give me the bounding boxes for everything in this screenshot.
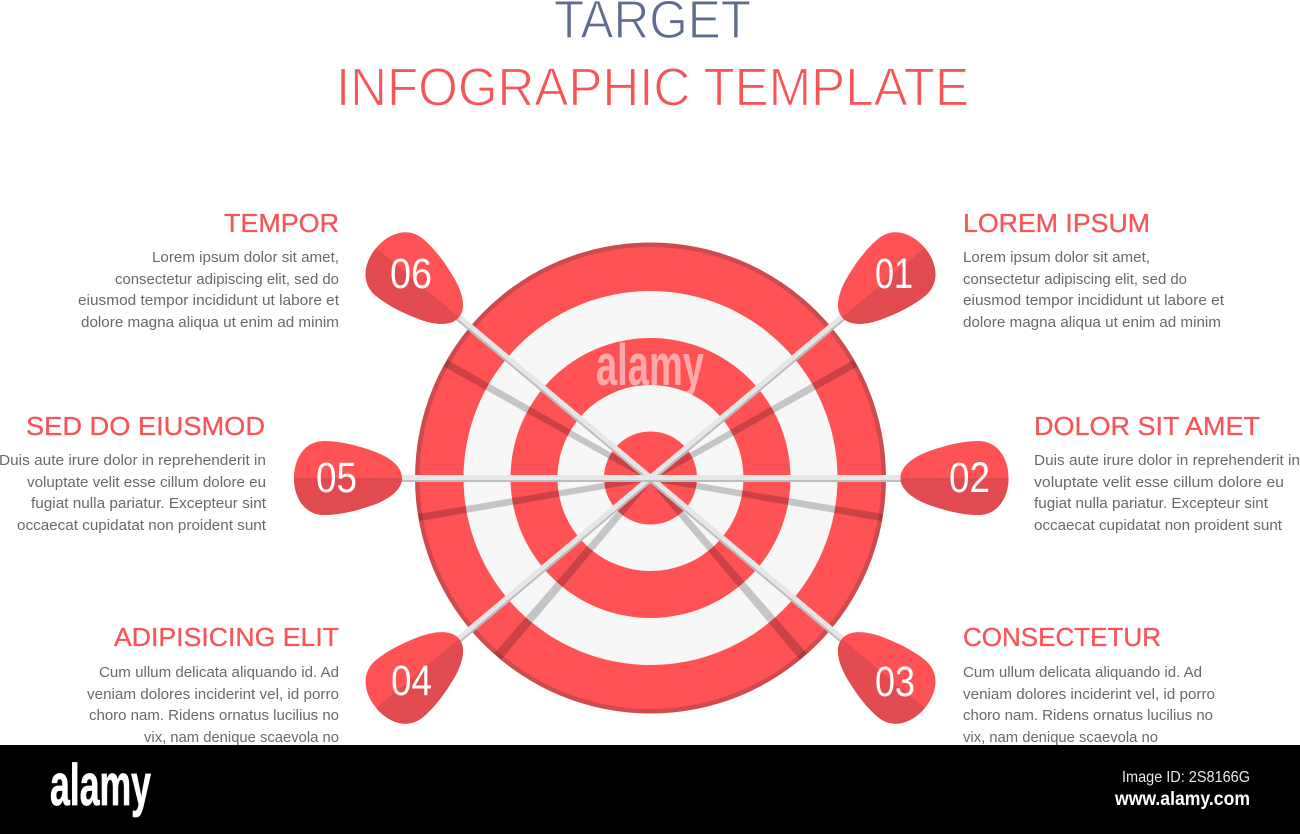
footer url: www.alamy.com <box>1114 789 1250 810</box>
text block 02: dolor sit amet: occaecat cupidatat non proident sunt <box>1034 518 1282 534</box>
text block 04: adipisicing elit: vix, nam denique scaevola no <box>144 730 339 746</box>
dart shadows on board <box>412 358 889 661</box>
text block 05: sed do eiusmod <box>0 411 266 534</box>
text block 02: dolor sit amet <box>1034 411 1300 534</box>
text block 01: lorem ipsum: LOREM IPSUM <box>963 208 1150 238</box>
dart 05 <box>294 441 652 515</box>
dart numbers: 02 <box>949 454 990 502</box>
dart numbers: 05 <box>316 454 357 502</box>
text block 05: sed do eiusmod: Duis aute irure dolor in reprehenderit in <box>0 453 266 469</box>
dart 04 <box>352 450 674 736</box>
dart numbers: 01 <box>875 250 913 298</box>
text block 02: dolor sit amet: voluptate velit esse cillum dolore eu <box>1034 475 1284 491</box>
dart numbers: 04 <box>391 657 432 705</box>
text block 03: consectetur: vix, nam denique scaevola no <box>963 730 1158 746</box>
text block 01: lorem ipsum: dolore magna aliqua ut enim ad minim <box>963 315 1221 331</box>
dart 03 <box>627 450 949 736</box>
text block 01: lorem ipsum: Lorem ipsum dolor sit amet, <box>963 250 1150 266</box>
text block 06: tempor: consectetur adipiscing elit, sed do <box>115 272 339 288</box>
text block 04: adipisicing elit: choro nam. Ridens ornatus lucilius no <box>89 708 339 724</box>
text block 03: consectetur: Cum ullum delicata aliquando id. Ad <box>963 665 1202 681</box>
text block 03: consectetur: veniam dolores inciderint vel, id porro <box>963 687 1215 703</box>
text block 02: dolor sit amet: Duis aute irure dolor in reprehenderit in <box>1034 453 1300 469</box>
dart numbers: 03 <box>875 658 915 706</box>
text block 01: lorem ipsum: consectetur adipiscing elit, sed do <box>963 272 1187 288</box>
text block 05: sed do eiusmod: voluptate velit esse cillum dolore eu <box>27 475 266 491</box>
text block 06: tempor: dolore magna aliqua ut enim ad minim <box>81 315 339 331</box>
text block 03: consectetur <box>963 622 1215 746</box>
text block 02: dolor sit amet: DOLOR SIT AMET <box>1034 411 1260 441</box>
text block 04: adipisicing elit: Cum ullum delicata aliquando id. Ad <box>99 665 339 681</box>
footer logo: alamy <box>50 753 151 818</box>
dart numbers: 06 <box>390 250 432 298</box>
text block 05: sed do eiusmod: fugiat nulla pariatur. Excepteur sint <box>31 496 266 512</box>
dart 02 <box>650 441 1008 515</box>
text block 06: tempor: eiusmod tempor incididunt ut labore et <box>78 293 339 309</box>
dart numbers <box>316 250 990 706</box>
text block 06: tempor <box>78 208 339 331</box>
footer image id: Image ID: 2S8166G <box>1122 769 1250 786</box>
text block 06: tempor: Lorem ipsum dolor sit amet, <box>152 250 339 266</box>
text block 01: lorem ipsum: eiusmod tempor incididunt ut labore et <box>963 293 1224 309</box>
watermark: alamy <box>596 333 704 398</box>
footer band <box>0 745 1300 834</box>
text block 05: sed do eiusmod: occaecat cupidatat non proident sunt <box>17 518 266 534</box>
text block 02: dolor sit amet: fugiat nulla pariatur. Excepteur sint <box>1034 496 1268 512</box>
title <box>336 0 969 118</box>
text block 04: adipisicing elit <box>87 622 339 746</box>
text block 01: lorem ipsum <box>963 208 1224 331</box>
text block 06: tempor: TEMPOR <box>224 208 339 238</box>
text block 04: adipisicing elit: veniam dolores inciderint vel, id porro <box>87 687 339 703</box>
text block 05: sed do eiusmod: SED DO EIUSMOD <box>26 411 265 441</box>
text block 04: adipisicing elit: ADIPISICING ELIT <box>114 622 339 652</box>
text block 03: consectetur: CONSECTETUR <box>963 622 1161 652</box>
text block 03: consectetur: choro nam. Ridens ornatus lucilius no <box>963 708 1213 724</box>
dart 01 <box>627 220 949 506</box>
dart 06 <box>352 220 674 506</box>
title: INFOGRAPHIC TEMPLATE <box>336 58 969 118</box>
target board <box>415 242 886 714</box>
